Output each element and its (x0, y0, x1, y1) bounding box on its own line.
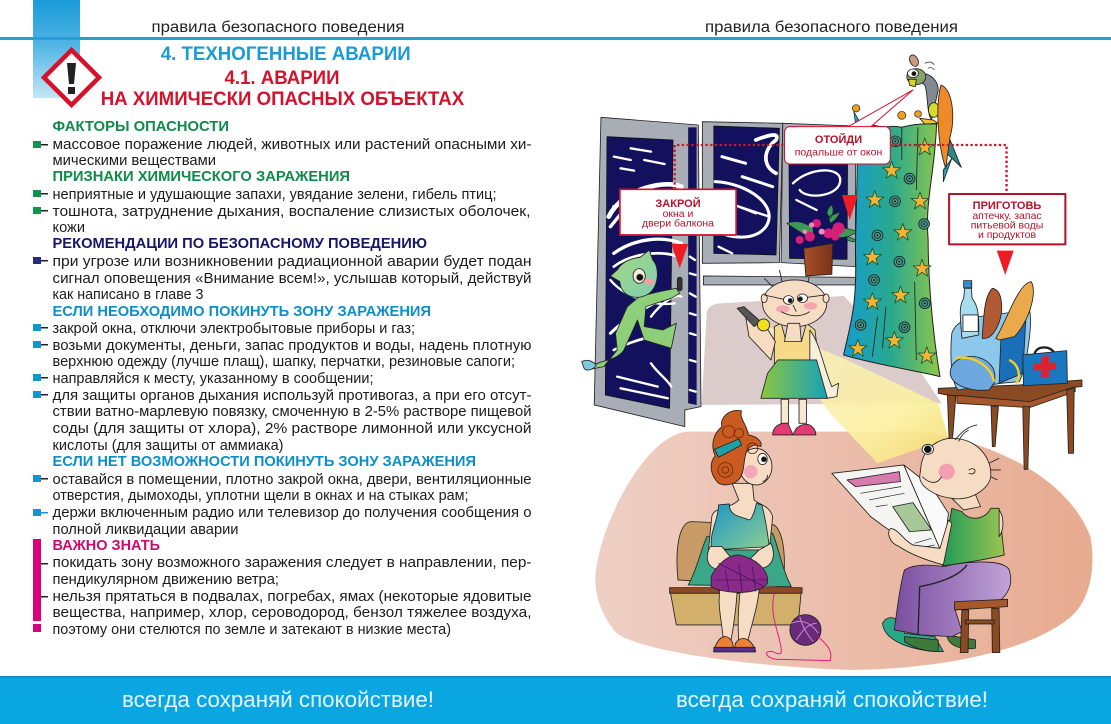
label text: prepare: ПРИГОТОВЬ (973, 200, 1041, 212)
potted flower (787, 205, 857, 276)
text block: important to know (33, 537, 532, 638)
text block: if you must leave the zone: закрой окна, отключи электробытовые приборы и газ; (52, 320, 415, 337)
text block: if you must leave the zone: ЕСЛИ НЕОБХОДИМО ПОКИНУТЬ ЗОНУ ЗАРАЖЕНИЯ (52, 303, 431, 320)
title: section: НА ХИМИЧЕСКИ ОПАСНЫХ ОБЪЕКТАХ (101, 88, 464, 110)
label text: close: окна и (663, 208, 694, 220)
label text: close: двери балкона (642, 218, 714, 230)
text block: important to know: нельзя прятаться в подвалах, погребах, ямах (некоторые ядовитые (52, 588, 532, 605)
ball of yarn (767, 593, 831, 661)
header rule (0, 37, 1111, 40)
text block: if you cannot leave the zone: полной ликвидации аварии (52, 521, 238, 538)
label: prepare (949, 194, 1065, 244)
illustration: family at home during a chemical accident (582, 54, 1092, 670)
text block: if you must leave the zone: верхнюю одежду (лучше плащ), шапку, перчатки, резиновые сапоги; (52, 353, 515, 370)
label text: prepare: и продуктов (978, 229, 1036, 241)
label text: close (642, 197, 714, 230)
text block: important to know: покидать зону возможного заражения следует в направлении, пер- (52, 554, 532, 571)
text block: important to know: пендикулярном движению ветра; (52, 571, 279, 588)
dotted connector (675, 145, 1007, 193)
arrow: prepare (997, 251, 1014, 275)
text block: important to know: поэтому они стелются по земле и затекают в низкие места) (52, 621, 451, 638)
right pane (781, 123, 855, 267)
text block: recommendations: как написано в главе 3 (52, 286, 204, 303)
window (594, 117, 855, 427)
arrow: step away (842, 195, 858, 220)
curtain (844, 105, 940, 377)
text block: if you must leave the zone: направляйся к месту, указанному в сообщении; (52, 370, 374, 387)
right footer slogan: всегда сохраняй спокойствие! (676, 687, 988, 712)
man reading newspaper (832, 425, 1011, 653)
text block: if you must leave the zone: для защиты органов дыхания используй противогаз, а при его отсут- (52, 387, 532, 404)
label text: step away (795, 133, 882, 158)
text block: signs of contamination (33, 168, 530, 236)
text block: hazard factors: ФАКТОРЫ ОПАСНОСТИ (52, 118, 229, 135)
text block: if you must leave the zone: кислоты (для защиты от аммиака) (52, 437, 284, 454)
title: section: 4.1. АВАРИИ (224, 67, 340, 89)
text block: signs of contamination: ПРИЗНАКИ ХИМИЧЕСКОГО ЗАРАЖЕНИЯ (52, 168, 350, 185)
text block: important to know: ВАЖНО ЗНАТЬ (52, 537, 160, 554)
blue corner tab (33, 0, 80, 98)
title: section (101, 67, 464, 110)
balcony door (594, 117, 701, 427)
speech wedge (847, 90, 913, 127)
text block: if you must leave the zone: возьми документы, деньги, запас продуктов и воды, надень плотную (52, 337, 532, 354)
right running header: правила безопасного поведения (705, 19, 958, 36)
label text: prepare (971, 200, 1043, 241)
text block: hazard factors: мическими веществами (52, 152, 216, 169)
curtain stars (849, 136, 936, 364)
text block: if you must leave the zone (33, 303, 532, 454)
title: chapter: 4. ТЕХНОГЕННЫЕ АВАРИИ (161, 43, 411, 65)
text block: hazard factors (33, 118, 532, 169)
text block: important to know: вещества, например, хлор, сероводород, бензол тяжелее воздуха, (52, 604, 532, 621)
label text: close: ЗАКРОЙ (655, 197, 701, 210)
label: step away (784, 127, 890, 164)
flashlight beam (764, 325, 948, 463)
text block: recommendations: РЕКОМЕНДАЦИИ ПО БЕЗОПАСНОМУ ПОВЕДЕНИЮ (52, 235, 427, 252)
text block: if you cannot leave the zone: держи включенным радио или телевизор до получения сообщения о (52, 504, 532, 521)
text block: recommendations (33, 235, 532, 303)
label: close (620, 189, 736, 235)
text block: signs of contamination: неприятные и удушающие запахи, увядание зелени, гибель птиц; (52, 186, 496, 203)
table (938, 380, 1082, 469)
text block: if you cannot leave the zone: отверстия, дымоходы, уплотни щели в окнах и на стыках рам; (52, 487, 468, 504)
parrot (907, 54, 961, 182)
cat (582, 250, 682, 370)
supplies: bottle, food, backpack, first aid kit (950, 281, 1067, 390)
left running header: правила безопасного поведения (152, 19, 404, 36)
label text: step away: подальше от окон (795, 146, 882, 158)
text block: recommendations: при угрозе или возникновении радиационной аварии будет подан (52, 253, 532, 270)
arrow: close (671, 244, 688, 268)
middle pane (702, 122, 783, 263)
text block: hazard factors: массовое поражение людей, животных или растений опасными хи- (52, 136, 532, 153)
big floor rug (595, 432, 1092, 670)
text block: if you cannot leave the zone: ЕСЛИ НЕТ ВОЗМОЖНОСТИ ПОКИНУТЬ ЗОНУ ЗАРАЖЕНИЯ (52, 453, 476, 470)
icon: hazard diamond (44, 50, 99, 105)
window sill (703, 276, 855, 285)
boy with flashlight (737, 270, 839, 435)
woman knitting (670, 411, 802, 652)
text block: if you must leave the zone: ствии ватно-марлевую повязку, смоченную в 2-5% растворе пищевой (52, 403, 532, 420)
text block: recommendations: сигнал оповещения «Внимание всем!», услышав который, действуй (52, 270, 532, 287)
text block: if you cannot leave the zone (33, 453, 532, 538)
footer band (0, 676, 1111, 724)
text block: if you must leave the zone: соды (для защиты от хлора), 2% растворе лимонной или уксусной (52, 420, 532, 437)
left footer slogan: всегда сохраняй спокойствие! (122, 687, 434, 712)
back floor area (702, 296, 942, 405)
text block: signs of contamination: тошнота, затруднение дыхания, воспаление слизистых оболочек, (52, 203, 530, 220)
text block: if you cannot leave the zone: оставайся в помещении, плотно закрой окна, двери, вентиляционные (52, 471, 532, 488)
text block: signs of contamination: кожи (52, 219, 85, 236)
label text: prepare: питьевой воды (971, 220, 1043, 232)
label text: prepare: аптечку, запас (972, 210, 1042, 222)
label text: step away: ОТОЙДИ (815, 133, 862, 146)
